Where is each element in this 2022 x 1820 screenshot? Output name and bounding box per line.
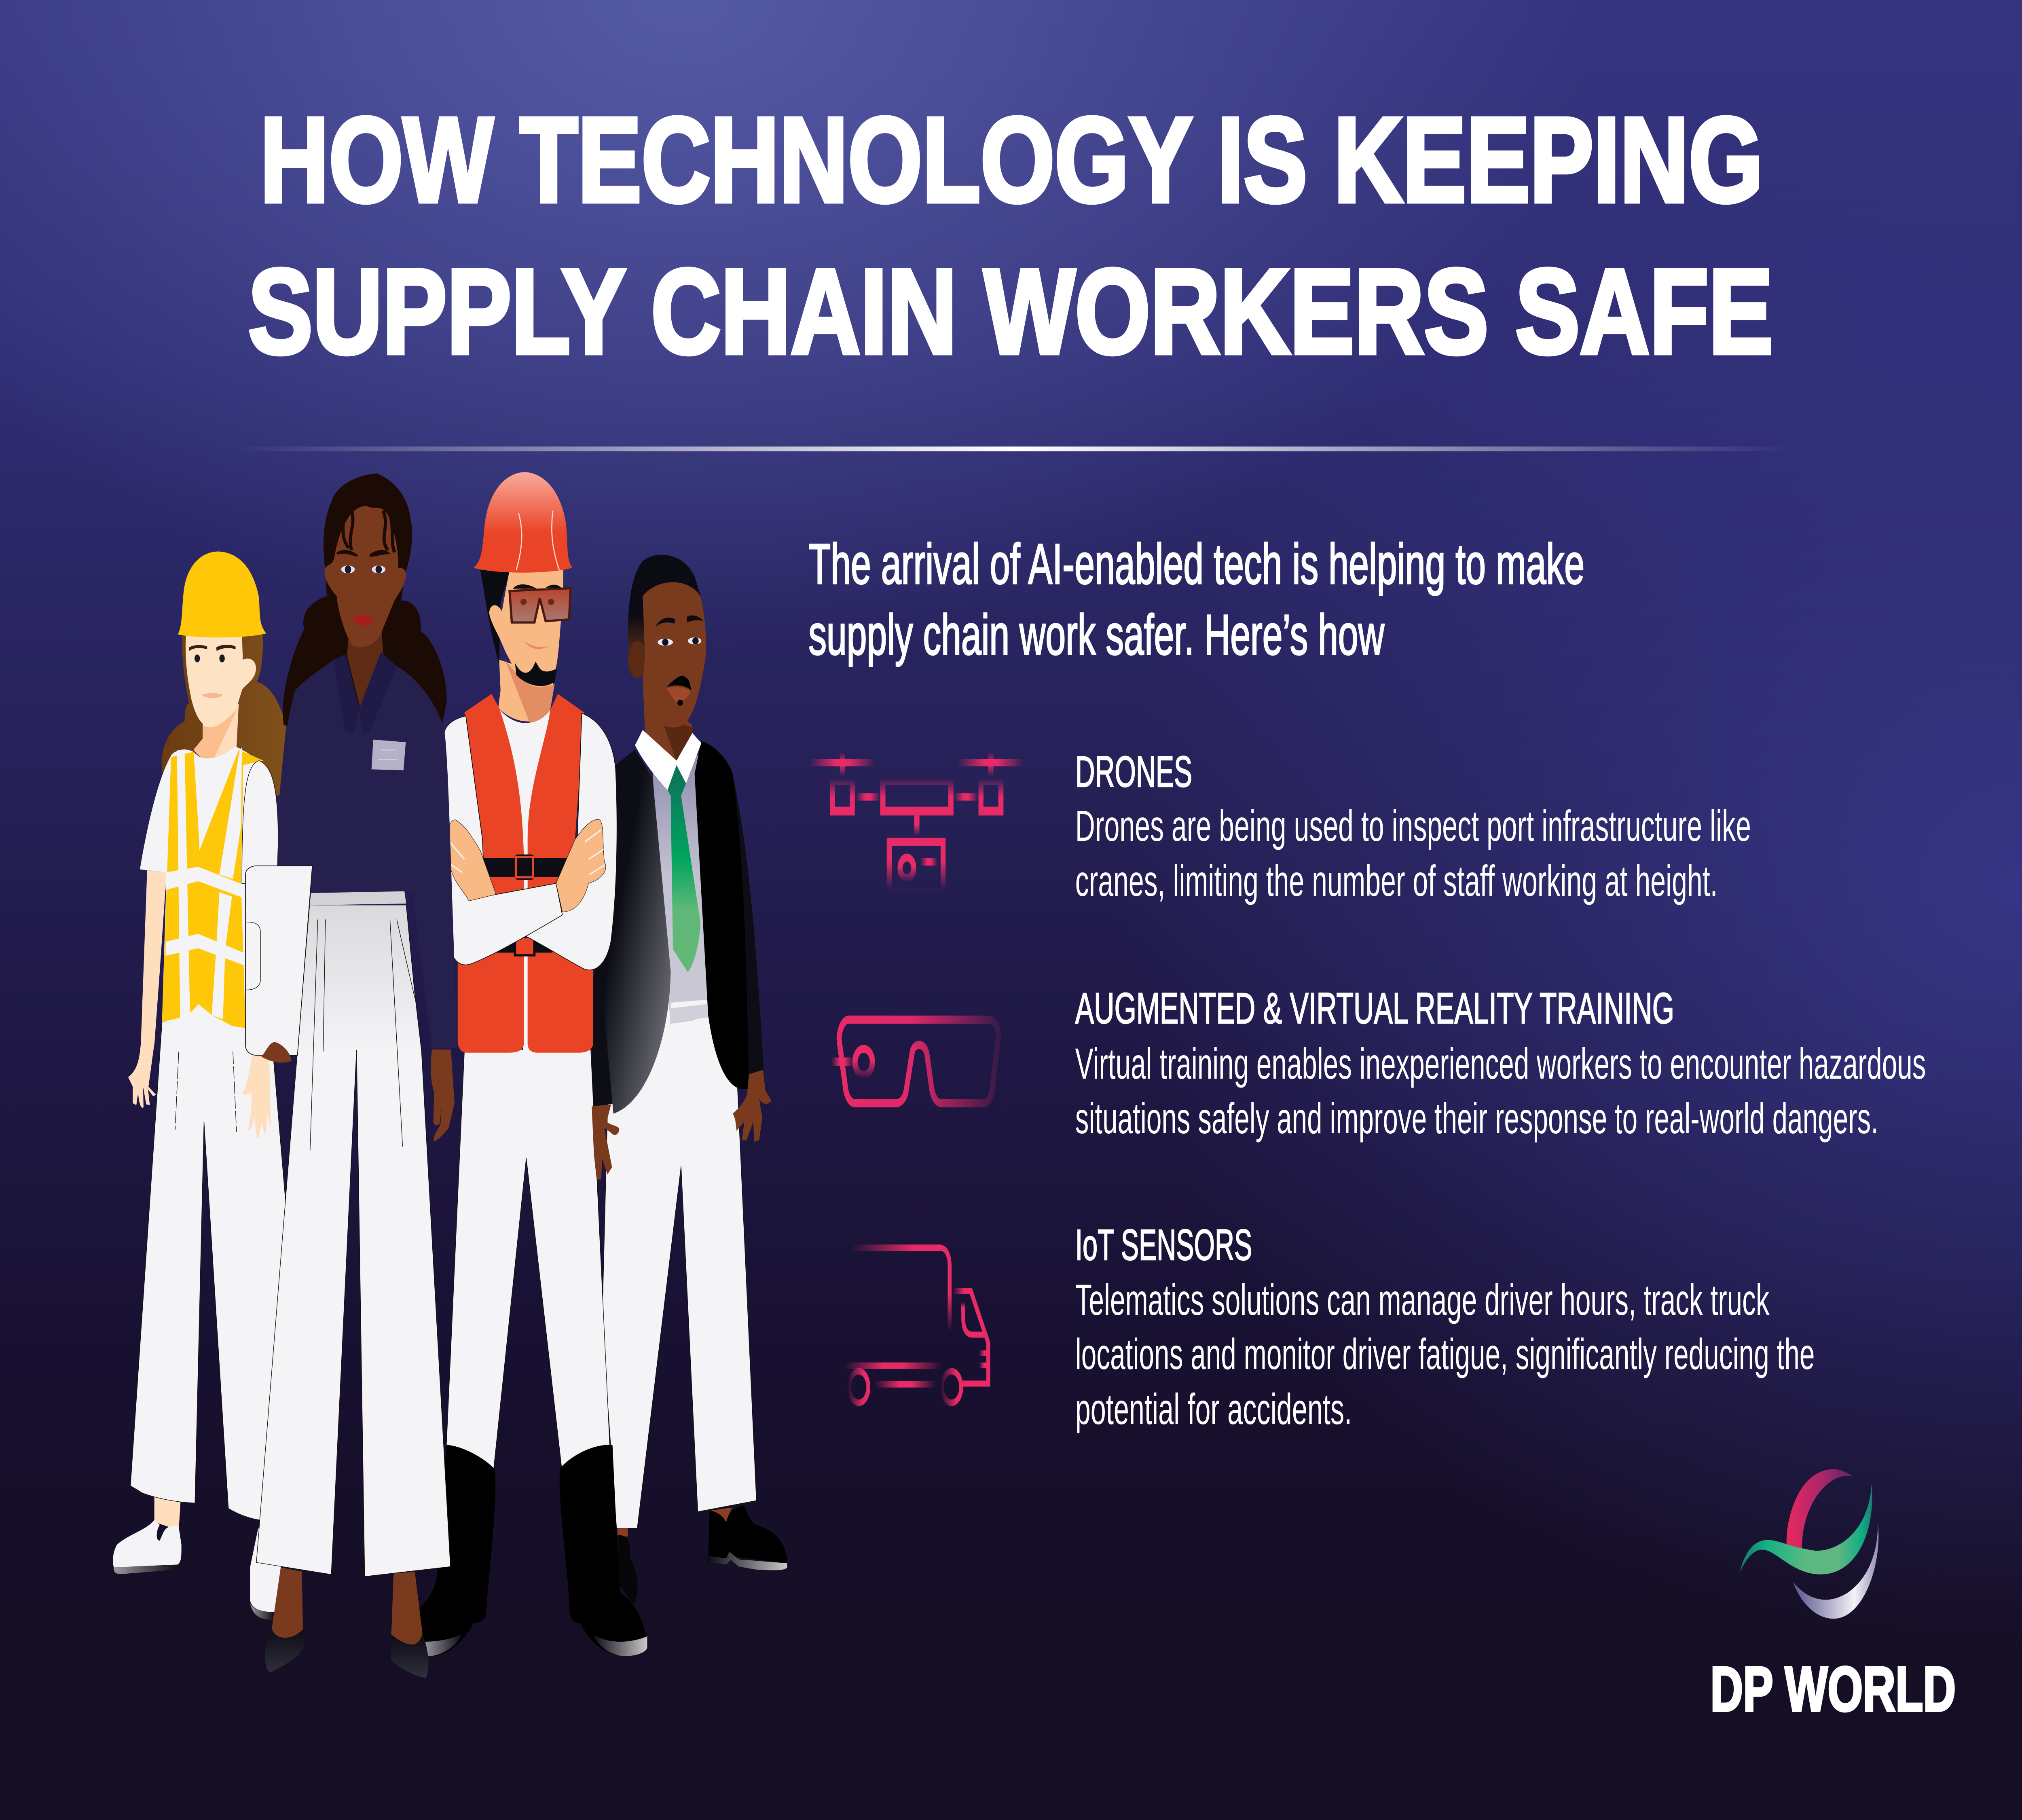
- panel: four workers: [113, 472, 787, 1678]
- hard hat: [474, 472, 572, 573]
- title: [248, 92, 1773, 379]
- icon: drone: [809, 752, 1024, 890]
- name badge: [372, 740, 406, 770]
- logo wordmark: DP WORLD: [1710, 1653, 1956, 1725]
- yellow hard hat: [178, 551, 266, 637]
- hair: [628, 555, 701, 655]
- text block: AR and VR training: AUGMENTED & VIRTUAL REALITY TRAINING: [1075, 984, 1674, 1033]
- text block: AR and VR training: [1075, 984, 1926, 1143]
- jacket: [591, 761, 661, 1106]
- person: man in orange vest: [419, 472, 647, 1656]
- intro text: The arrival of AI-enabled tech is helping to make: [808, 532, 1584, 596]
- hair: [480, 570, 510, 664]
- hair: [283, 473, 446, 726]
- person: man in suit: [591, 555, 787, 1604]
- navy jacket: [277, 652, 458, 1049]
- safety vest: [523, 831, 529, 1052]
- person: woman in yellow hard hat: [113, 551, 286, 1620]
- text block: drones: Drones are being used to inspect port infrastructure like: [1075, 802, 1751, 851]
- icon: truck: [844, 1244, 988, 1406]
- crossed arms: [496, 713, 617, 970]
- text block: drones: [1075, 747, 1751, 906]
- waistband: [310, 891, 406, 905]
- text block: drones: cranes, limiting the number of staff working at height.: [1075, 857, 1718, 906]
- safety glasses: [510, 588, 571, 622]
- text block: IoT sensors: locations and monitor driver fatigue, significantly reducing the: [1075, 1330, 1815, 1379]
- text block: IoT sensors: [1075, 1221, 1815, 1434]
- intro text: [808, 532, 1584, 667]
- arm: [141, 870, 167, 1045]
- shirt and tie: [653, 752, 709, 1028]
- text block: AR and VR training: Virtual training enables inexperienced workers to encounter hazardous: [1075, 1039, 1926, 1088]
- intro text: supply chain work safer. Here’s how: [808, 603, 1385, 667]
- clipboard: [245, 866, 312, 1055]
- person: woman in navy: [245, 473, 458, 1678]
- title: HOW TECHNOLOGY IS KEEPING: [260, 92, 1763, 227]
- hand: man in suit right hand: [592, 1105, 619, 1179]
- logo mark: [1740, 1469, 1878, 1619]
- text block: drones: DRONES: [1075, 747, 1192, 796]
- text block: IoT sensors: Telematics solutions can manage driver hours, track truck: [1075, 1276, 1770, 1325]
- text block: AR and VR training: situations safely and improve their response to real-world dangers.: [1075, 1094, 1878, 1143]
- safety vest: [162, 750, 264, 1028]
- title: SUPPLY CHAIN WORKERS SAFE: [248, 244, 1773, 379]
- hair: [162, 633, 286, 796]
- text block: IoT sensors: IoT SENSORS: [1075, 1221, 1252, 1270]
- icon: AR glasses: [831, 1020, 998, 1103]
- text block: IoT sensors: potential for accidents.: [1075, 1385, 1352, 1434]
- shirt: [485, 708, 557, 883]
- logo: DP World: [1710, 1469, 1956, 1725]
- wide trousers: [256, 905, 451, 1577]
- shirt: [140, 747, 278, 1028]
